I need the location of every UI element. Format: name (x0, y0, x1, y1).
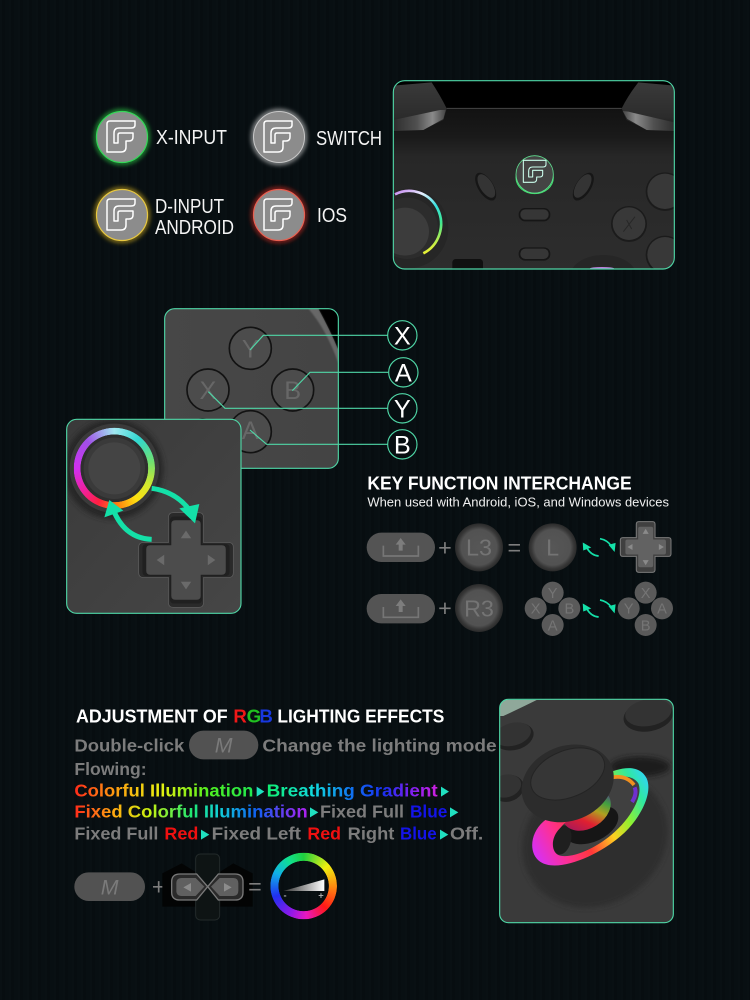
icon: D-pad small (620, 522, 671, 572)
panel: joystick and D-pad swap (63, 419, 241, 613)
key: M button brightness (74, 872, 145, 901)
text: flowing label: Flowing: (74, 759, 147, 779)
icon: brightness rainbow ring: - (283, 891, 287, 901)
heading: adjustment of RGB lighting effects: LIGHTING EFFECTS (277, 706, 444, 727)
arrows: swap stick and D-pad (584, 539, 615, 556)
icon: SWITCH white mode light (253, 111, 305, 163)
label: A: A (395, 359, 412, 387)
icon: rainbow LED ring (532, 768, 648, 866)
icon: iOS red mode light (253, 189, 305, 241)
key: L stick: L (546, 535, 559, 561)
panel: controller front close-up (392, 80, 675, 270)
text: lighting mode sequence: Fixed Full (74, 823, 158, 843)
icon: brightness rainbow ring (270, 853, 337, 919)
heading: KEY FUNCTION INTERCHANGE: KEY FUNCTION INTERCHANGE (367, 472, 632, 493)
key: R3 stick press (455, 584, 503, 632)
key: M button (189, 731, 258, 759)
icon: D-pad left and right highlighted (162, 854, 253, 920)
heading: adjustment of RGB lighting effects: B (259, 706, 273, 727)
key: R3 stick press: R3 (464, 595, 494, 621)
key: L3 stick press (455, 523, 503, 571)
equals: = (248, 874, 262, 900)
text: lighting mode sequence: Fixed Left (212, 823, 301, 843)
plus: + (152, 874, 165, 900)
button: X: X (200, 377, 217, 405)
button: A: A (242, 417, 259, 445)
key: share button (367, 594, 435, 623)
icon: face buttons before: X (531, 602, 541, 618)
button: A (229, 411, 271, 453)
label: D-INPUT ANDROID: D-INPUT (155, 196, 224, 218)
icon: face buttons before (525, 582, 580, 636)
panel: key function interchange (367, 472, 673, 636)
button: Y (229, 327, 271, 369)
text: lighting mode sequence: Blue (410, 801, 447, 821)
heading: adjustment of RGB lighting effects: G (247, 706, 261, 727)
arrows: swap face buttons (584, 600, 615, 617)
label: Y: Y (394, 395, 411, 423)
text: lighting mode sequence: Red (164, 823, 198, 843)
key: L stick (529, 523, 577, 571)
icon: face buttons before: A (548, 618, 558, 634)
text: lighting mode sequence: Off. (450, 823, 483, 843)
label: X (388, 321, 417, 350)
icon: face buttons after: Y (624, 602, 634, 618)
label: Y (388, 394, 417, 423)
panel: connection modes (96, 111, 382, 241)
button: B (272, 369, 314, 411)
text: lighting mode sequence: Fixed Full (320, 801, 404, 821)
key: share button (367, 533, 435, 562)
label: A (389, 358, 418, 387)
text: lighting mode sequence: Right (348, 823, 394, 843)
label: IOS: IOS (317, 205, 347, 227)
icon: D-INPUT Android yellow mode light (96, 189, 148, 241)
label: D-INPUT ANDROID: ANDROID (155, 217, 234, 239)
button: B: B (284, 377, 301, 405)
text: lighting mode sequence: Colorful Illumination (74, 781, 253, 801)
icon: RGB joystick ring (74, 428, 155, 509)
row: L3 combination (367, 522, 671, 572)
label: X: X (394, 322, 411, 350)
text: lighting mode sequence: Breathing Gradient (267, 781, 438, 801)
label: B: B (394, 431, 411, 459)
heading: adjustment of RGB lighting effects: ADJUSTMENT OF (76, 706, 228, 727)
text: lighting mode sequence: Fixed Colorful Illumination (74, 801, 308, 821)
icon: face buttons before: B (564, 602, 574, 618)
button: Y: Y (242, 335, 259, 363)
icon: face buttons before: Y (548, 586, 558, 602)
text: double-click instruction: Double-click (74, 736, 185, 756)
callout lines: button interchange (208, 335, 388, 444)
panel: RGB joystick close-up (499, 698, 674, 924)
icon: joystick shaft lit (564, 796, 611, 831)
icon: face buttons after: X (641, 586, 651, 602)
key: M button: M (215, 734, 233, 758)
plus: + (438, 595, 452, 621)
text: double-click instruction: Change the lighting mode (262, 736, 497, 756)
key: L3 stick press: L3 (466, 535, 492, 561)
icon: D-pad (139, 513, 233, 607)
equals: = (508, 534, 521, 560)
icon: face buttons after: A (657, 602, 667, 618)
panel: RGB lighting adjustment (74, 706, 497, 920)
subheading: When used with Android, iOS, and Windows devices (367, 496, 669, 510)
icon: brightness rainbow ring: + (318, 891, 324, 901)
label: X-INPUT: X-INPUT (156, 127, 227, 149)
row: R3 combination (367, 582, 673, 636)
icon: joystick cap (522, 744, 614, 822)
key: M button brightness: M (101, 875, 119, 899)
heading: adjustment of RGB lighting effects: R (233, 706, 247, 727)
icon: face buttons after: B (641, 618, 651, 634)
plus: + (438, 534, 452, 560)
icon: X-INPUT green mode light (96, 111, 148, 163)
icon: face buttons after (618, 582, 673, 636)
text: lighting mode sequence: Blue (400, 823, 437, 843)
arrow: D-pad to joystick (104, 500, 152, 539)
label: B (388, 430, 417, 459)
arrow: joystick to D-pad (152, 488, 199, 523)
text: lighting mode sequence: Red (307, 823, 341, 843)
label: SWITCH: SWITCH (316, 128, 382, 150)
icon: home button with logo (516, 156, 553, 194)
button: X (187, 369, 229, 411)
text: lighting mode sequence (74, 781, 483, 843)
panel: ABXY button mapping (165, 309, 418, 468)
